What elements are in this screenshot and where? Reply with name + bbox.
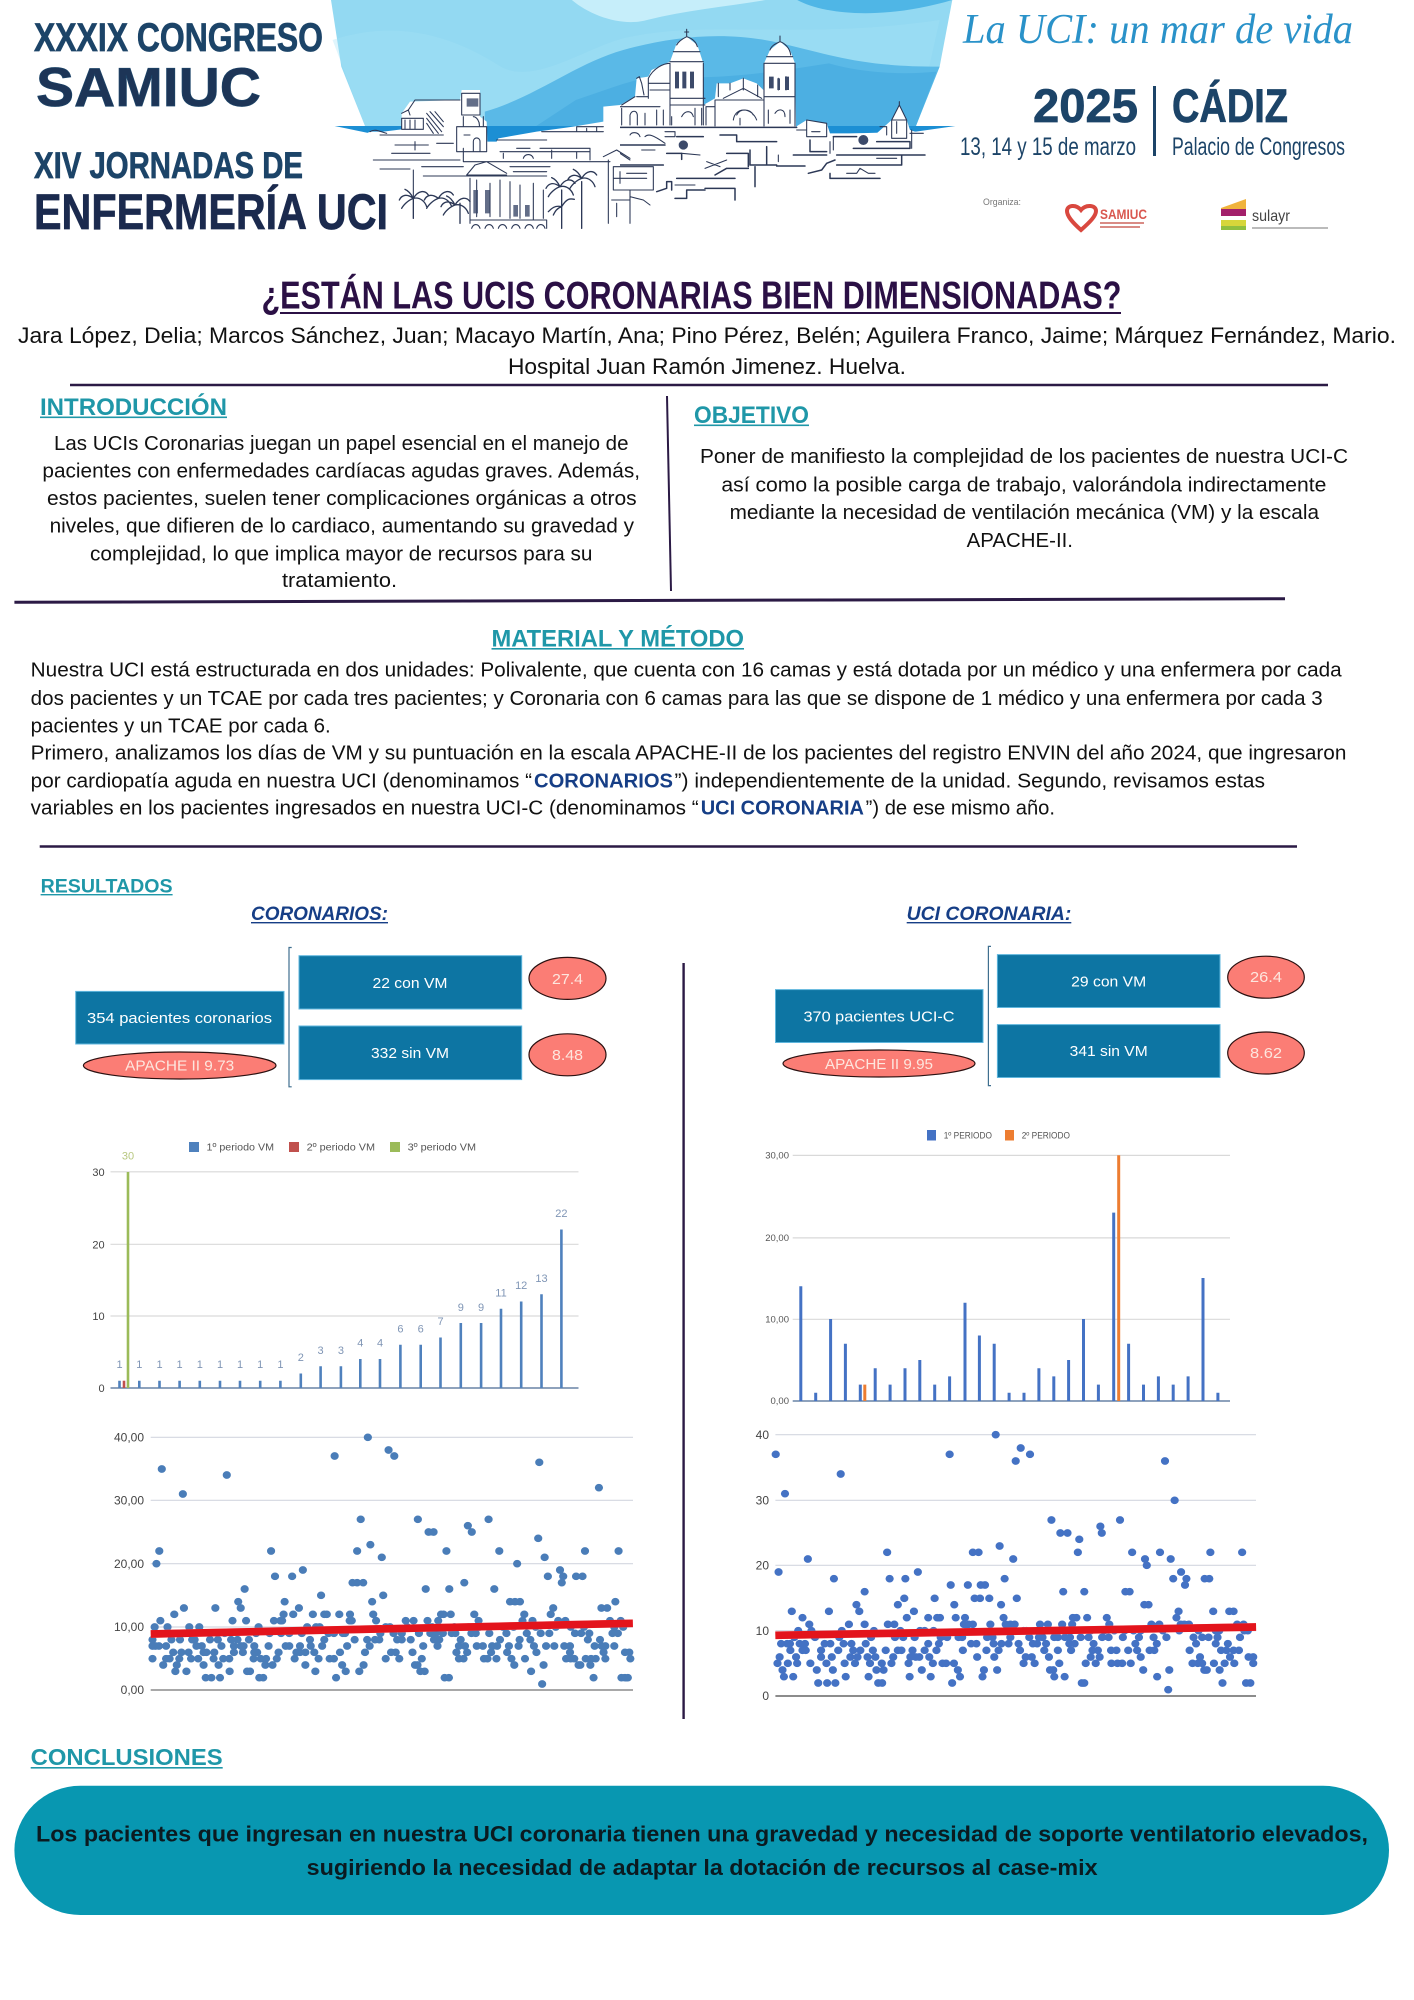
scatter chart: APACHE-II, coronarios: 10,00	[114, 1620, 144, 1634]
bar chart: días de VM, coronarios: 7	[437, 1316, 444, 1328]
text: material y método: ”) independientemente de la unidad. Segundo, revisamos estas	[674, 770, 1265, 792]
text: material y método: variables en los pacientes ingresados en nuestra UCI-C (denominamos “	[31, 797, 699, 819]
legend	[189, 1142, 476, 1154]
bar chart: días de VM, coronarios: 20	[92, 1239, 105, 1251]
bar chart: días de VM, coronarios: 1	[197, 1359, 203, 1371]
bar chart: días de VM, coronarios: 1	[277, 1359, 283, 1371]
bar chart: días de VM, UCI coronaria: 30,00	[765, 1150, 789, 1162]
bar chart: días de VM, coronarios: 30	[92, 1167, 105, 1179]
bar chart: días de VM, coronarios: 1	[136, 1359, 142, 1371]
diagram: coronary patient breakdown: 8.48	[552, 1047, 583, 1064]
callout: conclusions: sugiriendo la necesidad de adaptar la dotación de recursos al case-mix	[307, 1855, 1098, 1880]
authors and affiliation: Hospital Juan Ramón Jimenez. Huelva.	[508, 354, 906, 379]
diagram: UCI-C patient breakdown: 370 pacientes UCI-C	[804, 1008, 955, 1026]
legend: 1º PERIODO	[944, 1130, 992, 1140]
scatter chart: APACHE-II, UCI coronaria: 40	[756, 1428, 769, 1442]
text: objetivo	[700, 446, 1348, 552]
diagram: UCI-C patient breakdown: 8.62	[1250, 1045, 1282, 1062]
text: introducción: tratamiento.	[282, 570, 397, 592]
diagram: coronary patient breakdown: 354 pacientes coronarios	[87, 1010, 272, 1027]
diagram: UCI-C patient breakdown: 29 con VM	[1071, 974, 1146, 990]
bar chart: días de VM, coronarios: 0	[98, 1383, 105, 1395]
bar chart: días de VM, UCI coronaria: 20,00	[765, 1233, 789, 1244]
organisers: Organiza:	[983, 197, 1021, 207]
diagram: coronary patient breakdown: 332 sin VM	[371, 1045, 449, 1062]
scatter chart: APACHE-II, coronarios: 20,00	[114, 1557, 144, 1571]
bar chart: días de VM, coronarios: 3	[318, 1345, 324, 1357]
panel: UCI coronaria	[756, 904, 1304, 1703]
bar chart: días de VM, coronarios: 11	[495, 1288, 507, 1300]
heading: UCI coronaria: UCI CORONARIA:	[907, 904, 1071, 925]
text: objetivo: APACHE-II.	[967, 530, 1073, 552]
heading: resultados: RESULTADOS	[41, 876, 173, 898]
text: material y método	[31, 660, 1346, 819]
bar chart: días de VM, coronarios: 9	[478, 1302, 484, 1314]
diagram: coronary patient breakdown: 27.4	[552, 971, 583, 988]
heading: introducción: INTRODUCCIÓN	[40, 393, 227, 421]
bar chart: días de VM, coronarios: 1	[257, 1359, 263, 1371]
scatter chart: APACHE-II, UCI coronaria: 30	[756, 1494, 769, 1508]
legend: 3º periodo VM	[408, 1142, 476, 1154]
congress name: SAMIUC	[36, 56, 261, 118]
congress name: XIV JORNADAS DE	[34, 145, 303, 186]
diagram: UCI-C patient breakdown: 26.4	[1250, 969, 1282, 986]
bar chart: días de VM, coronarios: 1	[217, 1359, 223, 1371]
organisers: SAMIUC	[1100, 206, 1147, 222]
callout: conclusions: Los pacientes que ingresan en nuestra UCI coronaria tienen una gravedad y necesidad de soporte ventilatorio elevados,	[36, 1822, 1368, 1847]
diagram: coronary patient breakdown	[76, 948, 606, 1087]
text: material y método: por cardiopatía aguda en nuestra UCI (denominamos “	[31, 770, 532, 792]
scatter chart: APACHE-II, UCI coronaria: 0	[762, 1689, 769, 1703]
bar chart: días de VM, coronarios: 10	[92, 1311, 105, 1323]
organisers: sulayr	[1252, 208, 1291, 225]
scatter chart: APACHE-II, coronarios	[114, 1430, 633, 1697]
bar chart: días de VM, coronarios: 22	[555, 1208, 568, 1220]
heading: coronarios: CORONARIOS:	[251, 904, 388, 925]
bar chart: días de VM, coronarios: 3	[338, 1345, 344, 1357]
text: material y método: ”) de ese mismo año.	[866, 797, 1055, 819]
text: objetivo: así como la posible carga de trabajo, valorándola indirectamente	[721, 475, 1326, 497]
diagram: coronary patient breakdown: APACHE II 9.73	[125, 1058, 234, 1074]
title: ¿ESTÁN LAS UCIS CORONARIAS BIEN DIMENSIONADAS?	[262, 274, 1122, 318]
legend: 2º periodo VM	[307, 1142, 375, 1154]
scatter chart: APACHE-II, UCI coronaria: 10	[756, 1624, 769, 1638]
illustration: Cádiz skyline over blue sea	[331, 0, 955, 230]
date and venue: CÁDIZ	[1172, 79, 1288, 132]
text: introducción: estos pacientes, suelen tener complicaciones orgánicas a otros	[47, 488, 637, 510]
legend: 2º PERIODO	[1022, 1130, 1070, 1140]
text: material y método: pacientes y un TCAE por cada 6.	[31, 716, 331, 738]
authors and affiliation	[18, 323, 1396, 379]
scatter chart: APACHE-II, UCI coronaria	[756, 1428, 1256, 1703]
bar chart: días de VM, coronarios: 1	[177, 1359, 183, 1371]
organisers	[983, 197, 1328, 230]
congress name: ENFERMERÍA UCI	[34, 184, 388, 240]
bar chart: días de VM, coronarios: 30	[122, 1150, 134, 1162]
text: introducción: complejidad, lo que implica mayor de recursos para su	[90, 544, 592, 566]
bar chart: días de VM, coronarios: 13	[535, 1273, 548, 1285]
bar chart: días de VM, coronarios: 2	[298, 1352, 304, 1364]
text: introducción: pacientes con enfermedades cardíacas agudas graves. Además,	[42, 461, 640, 483]
text: material y método: CORONARIOS	[534, 770, 673, 792]
text: material y método: Nuestra UCI está estructurada en dos unidades: Polivalente, que cuenta con 16 camas y está dotada por un médico y una enfermera por cada	[31, 660, 1343, 682]
scatter chart: APACHE-II, coronarios: 30,00	[114, 1494, 144, 1508]
text: introducción: niveles, que difieren de lo cardiaco, aumentando su gravedad y	[50, 516, 634, 538]
bar chart: días de VM, coronarios: 4	[377, 1338, 383, 1350]
diagram: UCI-C patient breakdown: 341 sin VM	[1070, 1043, 1148, 1060]
bar chart: días de VM, UCI coronaria	[765, 1130, 1230, 1407]
heading: material y método: MATERIAL Y MÉTODO	[492, 625, 744, 653]
heading: objetivo: OBJETIVO	[694, 402, 809, 429]
bar chart: días de VM, coronarios	[92, 1142, 578, 1395]
bar chart: días de VM, coronarios: 1	[237, 1359, 243, 1371]
panel: coronarios	[76, 904, 633, 1697]
bar chart: días de VM, coronarios: 6	[397, 1324, 403, 1336]
legend	[927, 1130, 1070, 1140]
text: objetivo: Poner de manifiesto la complejidad de los pacientes de nuestra UCI-C	[700, 446, 1348, 468]
scatter chart: APACHE-II, coronarios: 40,00	[114, 1430, 144, 1444]
bar chart: días de VM, coronarios: 12	[515, 1280, 527, 1292]
congress name	[34, 16, 388, 240]
diagram: UCI-C patient breakdown: APACHE II 9.95	[825, 1056, 933, 1073]
tagline: La UCI: un mar de vida	[962, 7, 1353, 53]
text: objetivo: mediante la necesidad de ventilación mecánica (VM) y la escala	[730, 502, 1320, 524]
text: material y método: Primero, analizamos los días de VM y su puntuación en la escala APACHE-II de los pacientes del registro ENVIN del año 2024, que ingresaron	[31, 742, 1346, 764]
bar chart: días de VM, coronarios: 4	[357, 1338, 363, 1350]
bar chart: días de VM, coronarios: 6	[418, 1324, 424, 1336]
bar chart: días de VM, coronarios: 1	[116, 1359, 123, 1371]
header banner	[34, 0, 1353, 240]
date and venue: 2025	[1033, 79, 1138, 132]
panel: introducción	[40, 393, 640, 592]
scatter chart: APACHE-II, UCI coronaria: 20	[756, 1558, 769, 1572]
date and venue: Palacio de Congresos	[1172, 133, 1345, 161]
date and venue: 13, 14 y 15 de marzo	[960, 133, 1136, 161]
panel: objetivo	[694, 402, 1348, 552]
diagram: coronary patient breakdown: 22 con VM	[372, 975, 448, 992]
bar chart: días de VM, UCI coronaria: 0,00	[770, 1396, 789, 1407]
legend: 1º periodo VM	[206, 1142, 274, 1154]
scatter chart: APACHE-II, coronarios: 0,00	[121, 1683, 144, 1697]
text: introducción: Las UCIs Coronarias juegan un papel esencial en el manejo de	[54, 433, 628, 455]
authors and affiliation: Jara López, Delia; Marcos Sánchez, Juan; Macayo Martín, Ana; Pino Pérez, Belén; Aguilera Franco, Jaime; Márquez Fernández, Mario.	[18, 323, 1396, 348]
text: material y método: dos pacientes y un TCAE por cada tres pacientes; y Coronaria con 6 camas para las que se dispone de 1 médico y una enfermera por cada 3	[31, 688, 1323, 710]
date and venue	[960, 79, 1345, 161]
panel: material y método	[31, 625, 1346, 819]
text: material y método: UCI CORONARIA	[701, 797, 864, 819]
bar chart: días de VM, coronarios: 9	[458, 1302, 464, 1314]
bar chart: días de VM, coronarios: 1	[156, 1359, 163, 1371]
text: introducción	[42, 433, 640, 592]
callout: conclusions	[14, 1786, 1389, 1915]
diagram: UCI-C patient breakdown	[776, 946, 1304, 1086]
congress name: XXXIX CONGRESO	[34, 16, 323, 60]
bar chart: días de VM, UCI coronaria: 10,00	[765, 1314, 789, 1326]
heading: conclusiones: CONCLUSIONES	[31, 1744, 223, 1770]
